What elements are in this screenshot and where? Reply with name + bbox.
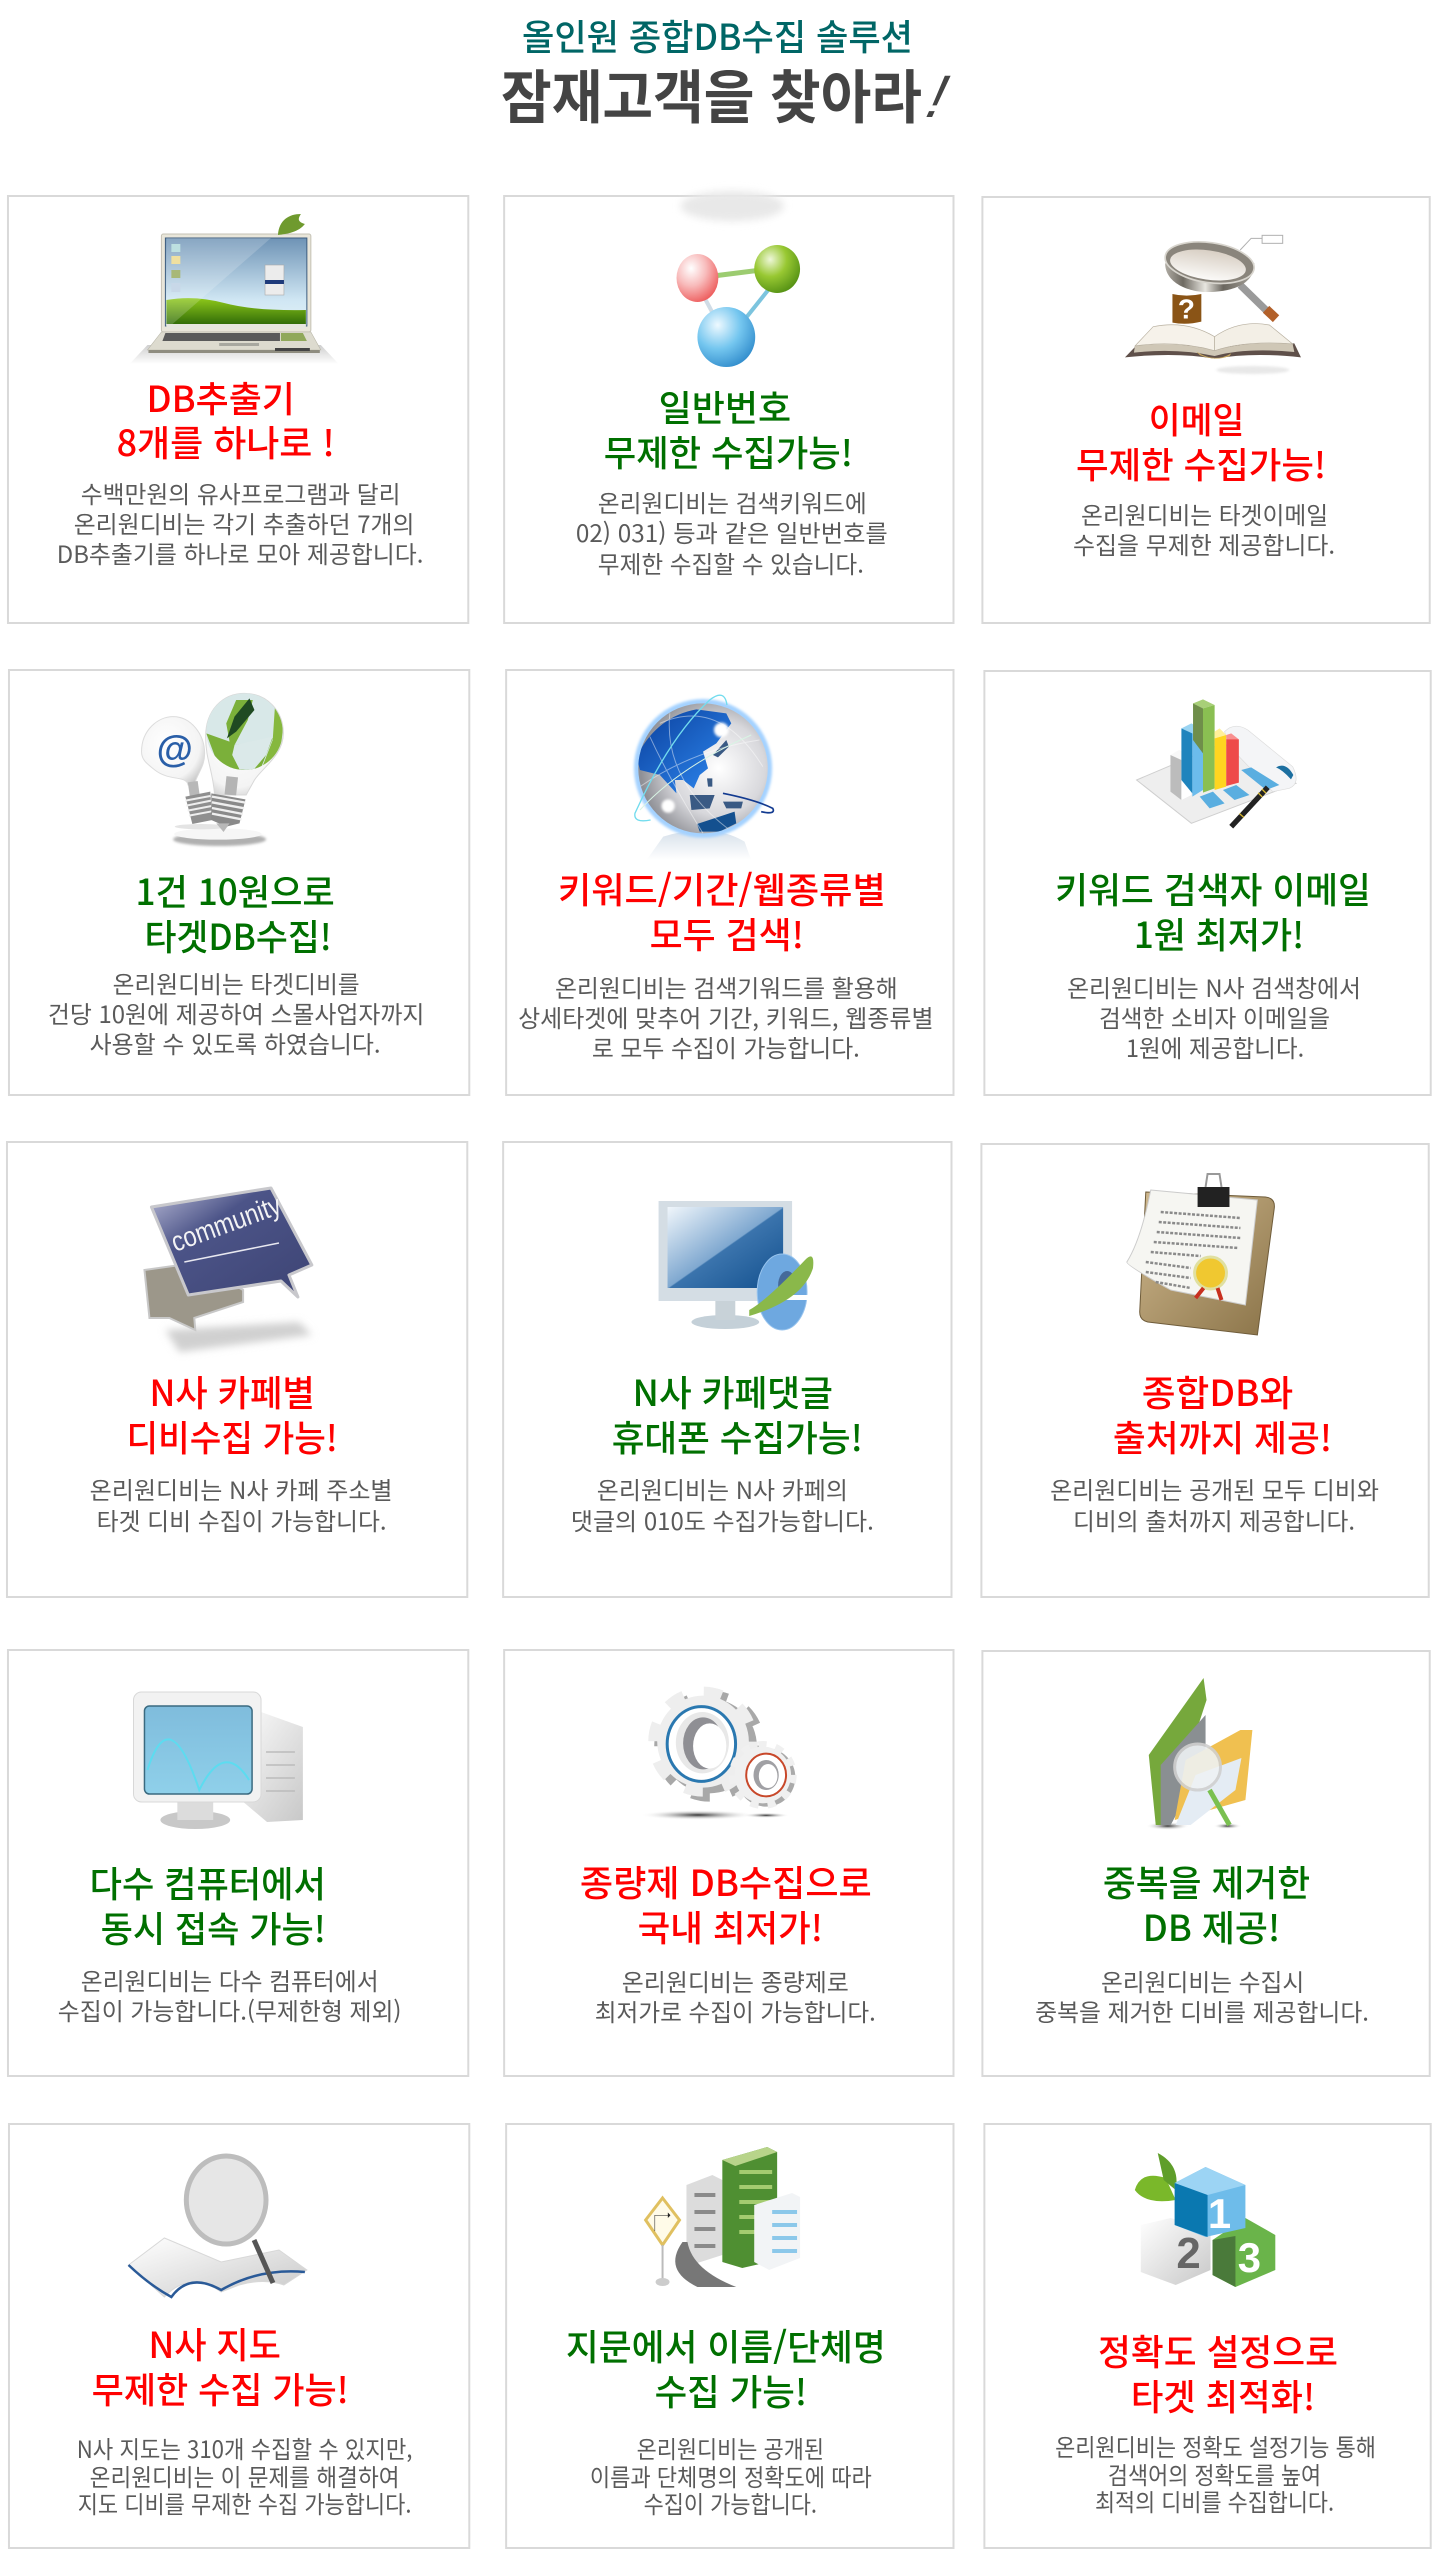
heading bbox=[612, 1365, 863, 1462]
heading: 키워드 검색자 이메일 bbox=[1055, 862, 1371, 914]
body text bbox=[90, 1471, 393, 1537]
heading bbox=[1113, 1365, 1332, 1462]
panel: 10 won per item bbox=[9, 670, 469, 1095]
body text: 타겟 디비 수집이 가능합니다. bbox=[97, 1502, 387, 1537]
heading bbox=[580, 1855, 872, 1952]
body text: 이름과 단체명의 정확도에 따라 bbox=[590, 2458, 872, 2493]
icon: number cubes and leaves bbox=[1135, 2153, 1275, 2287]
heading: N사 카페별 bbox=[149, 1365, 315, 1417]
heading: 다수 컴퓨터에서 bbox=[90, 1856, 326, 1908]
icon: laptop bbox=[130, 214, 339, 364]
heading bbox=[136, 864, 335, 961]
heading: 타겟DB수집! bbox=[144, 909, 332, 961]
body text bbox=[518, 969, 934, 1064]
icon: molecule bbox=[677, 245, 800, 367]
panel: multiple computers bbox=[8, 1650, 468, 2076]
heading: 지문에서 이름/단체명 bbox=[566, 2319, 886, 2371]
body text: 온리원디비는 수집시 bbox=[1101, 1963, 1304, 1998]
body text bbox=[1055, 2428, 1376, 2518]
panel: DB extractor bbox=[8, 196, 468, 623]
body text: 온리원디비는 N사 검색창에서 bbox=[1067, 969, 1361, 1004]
icon: number cubes and leaves: 1 bbox=[1208, 2190, 1231, 2237]
title: main heading: ! bbox=[915, 64, 961, 130]
panel: integrated DB and source bbox=[981, 1144, 1429, 1597]
heading bbox=[92, 2317, 349, 2414]
body text: 온리원디비는 종량제로 bbox=[622, 1963, 849, 1998]
icon: number cubes and leaves: 2 bbox=[1176, 2229, 1201, 2278]
heading: 수집 가능! bbox=[655, 2364, 807, 2416]
heading: 무제한 수집가능! bbox=[604, 425, 853, 477]
body text: 상세타겟에 맞추어 기간, 키워드, 웹종류별 bbox=[518, 999, 934, 1034]
body text bbox=[77, 2430, 412, 2520]
heading bbox=[558, 862, 886, 959]
heading: 무제한 수집 가능! bbox=[92, 2362, 349, 2414]
icon: pan and book: ? bbox=[1178, 294, 1195, 325]
icon: buildings and road sign: ↱ bbox=[653, 2211, 672, 2233]
body text: DB추출기를 하나로 모아 제공합니다. bbox=[57, 535, 423, 570]
panel: N cafe comment phone bbox=[503, 1142, 951, 1597]
body text bbox=[1050, 1471, 1379, 1537]
heading bbox=[1055, 862, 1371, 959]
body text: 사용할 수 있도록 하였습니다. bbox=[90, 1025, 381, 1060]
body text: 검색한 소비자 이메일을 bbox=[1099, 999, 1330, 1034]
body text: 온리원디비는 타겟디비를 bbox=[113, 965, 360, 1000]
panel: N map bbox=[9, 2124, 469, 2548]
decoration: top grey ellipse bbox=[680, 191, 784, 221]
heading: 타겟 최적화! bbox=[1131, 2369, 1315, 2421]
body text: N사 지도는 310개 수집할 수 있지만, bbox=[77, 2430, 412, 2465]
heading: N사 카페댓글 bbox=[633, 1365, 833, 1417]
heading: 무제한 수집가능! bbox=[1076, 437, 1326, 489]
panel: name extraction bbox=[506, 2124, 953, 2548]
heading: 동시 접속 가능! bbox=[101, 1901, 326, 1953]
panel: email bbox=[982, 197, 1430, 623]
body text bbox=[595, 1963, 876, 2028]
body text bbox=[1035, 1963, 1369, 2028]
heading bbox=[1103, 1855, 1310, 1952]
icon: desktop computer bbox=[134, 1692, 303, 1829]
body text: 온리원디비는 이 문제를 해결하여 bbox=[90, 2458, 400, 2493]
title: main heading: 잠재고객을 찾아라 bbox=[501, 51, 922, 135]
heading bbox=[90, 1856, 326, 1953]
panel: metered DB bbox=[504, 1650, 953, 2076]
body text: 댓글의 010도 수집가능합니다. bbox=[571, 1502, 874, 1537]
body text: 최적의 디비를 수집합니다. bbox=[1095, 2483, 1334, 2518]
body text: 디비의 출처까지 제공합니다. bbox=[1073, 1502, 1355, 1537]
heading: 종량제 DB수집으로 bbox=[580, 1855, 872, 1907]
heading bbox=[127, 1365, 338, 1462]
icon: globe and @ light bulbs: @ bbox=[157, 728, 193, 770]
body text: 중복을 제거한 디비를 제공합니다. bbox=[1035, 1993, 1369, 2028]
icon: globe and @ light bulbs bbox=[142, 693, 284, 846]
heading bbox=[604, 380, 853, 477]
heading: N사 지도 bbox=[148, 2317, 281, 2369]
panel: accuracy setting bbox=[984, 2124, 1431, 2548]
panel: keyword period web type bbox=[506, 670, 953, 1095]
body text: 건당 10원에 제공하여 스몰사업자까지 bbox=[48, 995, 424, 1030]
heading: 1건 10원으로 bbox=[136, 864, 335, 916]
heading: 디비수집 가능! bbox=[127, 1410, 338, 1462]
heading bbox=[1098, 2324, 1338, 2421]
heading bbox=[1076, 392, 1326, 489]
body text: 온리원디비는 각기 추출하던 7개의 bbox=[74, 505, 414, 540]
body text: 수집을 무제한 제공합니다. bbox=[1073, 526, 1335, 561]
icon: gears bbox=[640, 1692, 795, 1820]
icon: community speech bubbles: community bbox=[167, 1189, 285, 1258]
body text: 온리원디비는 N사 카페 주소별 bbox=[90, 1471, 393, 1506]
icon: magnifier and book bbox=[129, 2156, 307, 2297]
body text bbox=[571, 1471, 874, 1537]
body text: 온리원디비는 N사 카페의 bbox=[597, 1471, 848, 1506]
panel: deduplicated DB bbox=[982, 1651, 1430, 2076]
panel: N cafe DB bbox=[7, 1142, 467, 1597]
panel: general numbers bbox=[504, 191, 953, 623]
heading: DB 제공! bbox=[1143, 1900, 1280, 1952]
icon: number cubes and leaves: 3 bbox=[1238, 2234, 1261, 2281]
icon: earth globe bbox=[634, 695, 773, 860]
body text bbox=[590, 2430, 872, 2520]
body text: 온리원디비는 검색키워드에 bbox=[598, 484, 867, 519]
icon: buildings and road sign bbox=[646, 2147, 800, 2287]
body text bbox=[58, 1962, 402, 2027]
heading: 정확도 설정으로 bbox=[1098, 2324, 1338, 2376]
heading: 모두 검색! bbox=[650, 907, 804, 959]
heading: 출처까지 제공! bbox=[1113, 1410, 1332, 1462]
body text: 수집이 가능합니다. bbox=[644, 2485, 817, 2520]
heading bbox=[566, 2319, 886, 2416]
body text: 온리원디비는 다수 컴퓨터에서 bbox=[81, 1962, 379, 1997]
body text bbox=[1073, 496, 1335, 561]
heading: 8개를 하나로 ! bbox=[117, 415, 335, 467]
body text: 최저가로 수집이 가능합니다. bbox=[595, 1993, 876, 2028]
heading: 1원 최저가! bbox=[1134, 907, 1304, 959]
title: solution subtitle: 올인원 종합DB수집 솔루션 bbox=[522, 9, 913, 61]
body text: 온리원디비는 타겟이메일 bbox=[1081, 496, 1328, 531]
body text: 무제한 수집할 수 있습니다. bbox=[598, 545, 864, 580]
heading: 국내 최저가! bbox=[638, 1900, 823, 1952]
icon: bar chart on paper bbox=[1137, 699, 1296, 827]
body text: 온리원디비는 공개된 모두 디비와 bbox=[1050, 1471, 1379, 1506]
body text: 1원에 제공합니다. bbox=[1126, 1029, 1304, 1064]
body text: 온리원디비는 검색기워드를 활용해 bbox=[555, 969, 898, 1004]
icon: folder and magnifier bbox=[1146, 1678, 1252, 1830]
body text: 수백만원의 유사프로그램과 달리 bbox=[81, 475, 401, 510]
body text bbox=[576, 484, 888, 580]
body text: 온리원디비는 공개된 bbox=[637, 2430, 824, 2465]
body text: 수집이 가능합니다.(무제한형 제외) bbox=[58, 1992, 402, 2027]
heading: 키워드/기간/웹종류별 bbox=[558, 862, 886, 914]
body text: 로 모두 수집이 가능합니다. bbox=[592, 1029, 860, 1064]
heading: 종합DB와 bbox=[1142, 1365, 1293, 1417]
heading: 중복을 제거한 bbox=[1103, 1855, 1310, 1907]
body text bbox=[57, 475, 423, 570]
icon: community speech bubbles bbox=[144, 1188, 312, 1352]
heading: 일반번호 bbox=[659, 380, 791, 432]
heading: 휴대폰 수집가능! bbox=[612, 1410, 863, 1462]
body text: 02) 031) 등과 같은 일반번호를 bbox=[576, 514, 888, 549]
body text: 검색어의 정확도를 높여 bbox=[1108, 2456, 1321, 2491]
heading bbox=[117, 371, 335, 467]
icon: clipboard with document bbox=[1127, 1174, 1274, 1335]
heading: 이메일 bbox=[1149, 392, 1244, 444]
body text: 지도 디비를 무제한 수집 가능합니다. bbox=[78, 2485, 411, 2520]
heading: DB추출기 bbox=[146, 371, 295, 423]
icon: monitor and browser logo bbox=[659, 1201, 815, 1330]
icon: pan and book bbox=[1125, 235, 1301, 374]
body text bbox=[1067, 969, 1361, 1064]
panel: keyword searcher email bbox=[984, 671, 1431, 1095]
body text bbox=[48, 965, 424, 1060]
body text: 온리원디비는 정확도 설정기능 통해 bbox=[1055, 2428, 1376, 2463]
